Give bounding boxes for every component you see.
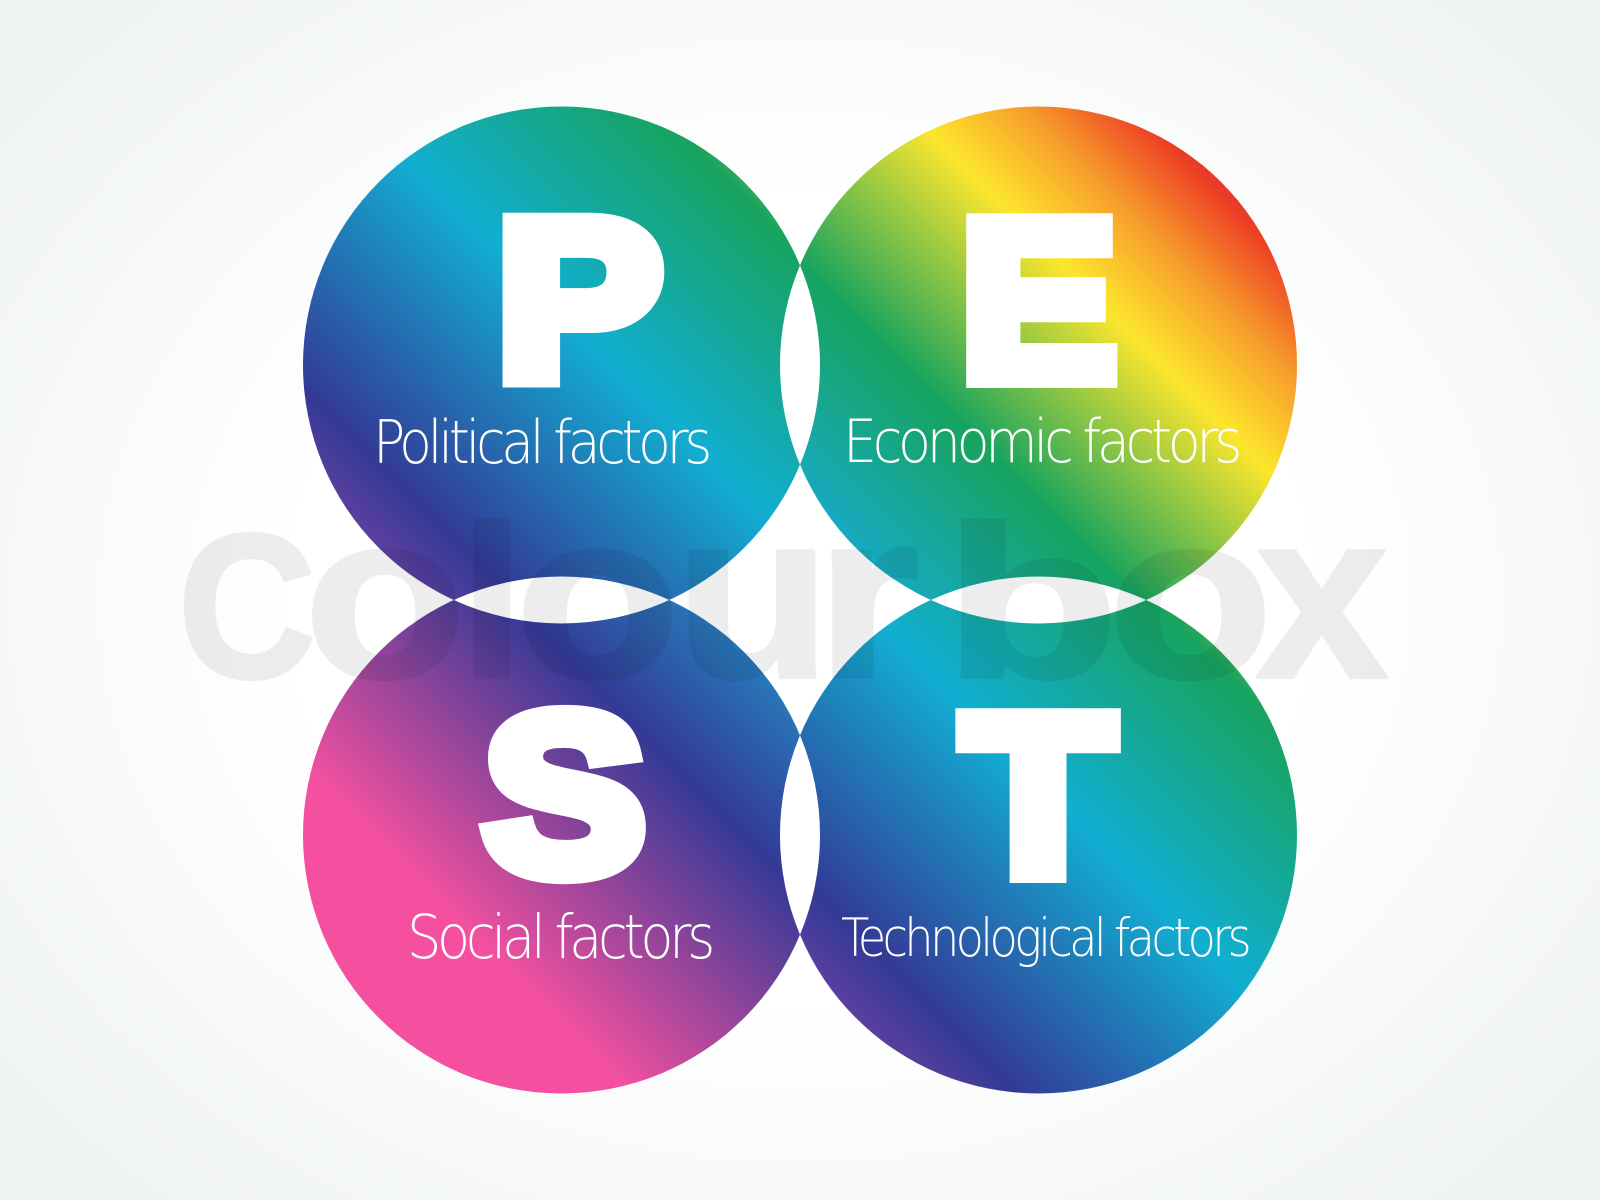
letter E: E bbox=[961, 175, 1116, 426]
letter T: T bbox=[964, 669, 1113, 921]
circle: political bbox=[303, 106, 820, 624]
circle: economic bbox=[780, 106, 1297, 624]
overlap lenses between circles bbox=[454, 265, 1146, 935]
circle: social bbox=[303, 576, 820, 1094]
panel: Economic factors bbox=[780, 106, 1297, 624]
panel: Social factors bbox=[303, 576, 820, 1094]
circle: technological bbox=[780, 576, 1297, 1094]
label: Economic factors: Economic factors bbox=[843, 407, 1238, 477]
watermark: Colourbox: x bbox=[1256, 463, 1388, 728]
label: Social factors: Social factors bbox=[407, 902, 712, 973]
watermark: Colourbox: o bbox=[1108, 464, 1273, 727]
label: Technological factors: Technological factors bbox=[841, 908, 1249, 969]
label: Political factors: Political factors bbox=[373, 408, 708, 478]
watermark: Colourbox: C bbox=[178, 492, 316, 721]
watermark: Colourbox: b bbox=[944, 481, 1119, 723]
watermark: Colourbox bbox=[178, 463, 1388, 728]
letter P: P bbox=[497, 175, 662, 426]
watermark: Colourbox: o bbox=[515, 464, 680, 727]
watermark: Colourbox: l bbox=[459, 481, 525, 723]
watermark: Colourbox: u bbox=[675, 463, 831, 728]
watermark: Colourbox: r bbox=[816, 463, 920, 728]
panel: Political factors bbox=[303, 106, 820, 624]
panel: Technological factors bbox=[780, 576, 1297, 1094]
watermark: Colourbox: o bbox=[304, 464, 466, 727]
letter S: S bbox=[484, 669, 645, 920]
